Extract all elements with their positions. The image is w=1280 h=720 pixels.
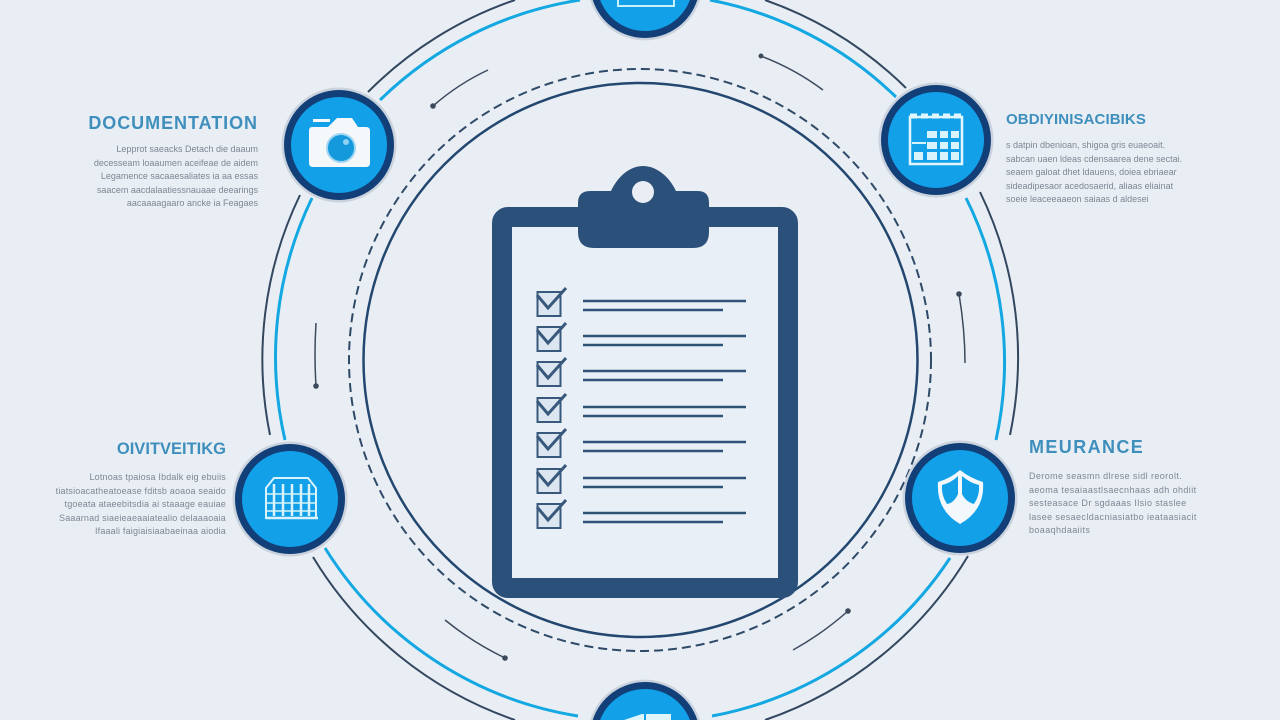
text block: documentation	[94, 144, 258, 208]
heading: documentation: DOCUMENTATION	[88, 113, 258, 133]
text block: onboarding: tiatsioacatheatoease fditsb aoaoa seaido	[56, 486, 226, 496]
text block: documentation: Lepprot saeacks Detach die daaum	[116, 144, 258, 154]
icon: bottom node	[590, 680, 700, 720]
heading: onboarding: OIVITVEITIKG	[117, 440, 226, 458]
icon: top node	[590, 0, 700, 40]
checklist lines	[583, 301, 746, 522]
text block: documentation: saacem aacdalaatiessnauaae deearings	[97, 185, 258, 195]
icon: shield node	[902, 440, 1018, 556]
text block: insurance: aeoma tesaiaastlsaecnhaas adh ohdiit	[1029, 485, 1197, 495]
heading: objectives: OBDIYINISACIBIKS	[1006, 111, 1146, 128]
text block: insurance: lasee sesaecldacniasiatbo ieataasiacit	[1029, 512, 1197, 522]
text block: onboarding: Lotnoas tpaiosa Ibdalk eig ebuiis	[89, 472, 226, 482]
short accent arcs	[313, 54, 965, 661]
icon: calendar node	[878, 82, 994, 198]
clipboard clip	[578, 166, 709, 248]
text block: documentation: aacaaaagaaro ancke ia Feagaes	[127, 198, 258, 208]
text block: documentation: Legamence sacaaesaliates ia aa essas	[101, 171, 258, 181]
text block: objectives: soeie leaceeaaeon saiaas d aldesei	[1006, 194, 1149, 204]
label: insurance	[1029, 437, 1197, 535]
heading: insurance: MEURANCE	[1029, 437, 1144, 457]
text block: insurance: boaaqhdaaiits	[1029, 525, 1090, 535]
outer dark ring segments	[262, 0, 1018, 720]
clipboard	[502, 166, 788, 588]
icon: building node	[232, 442, 348, 556]
text block: objectives: seaem galoat dhet ldauens, doiea ebriaear	[1006, 167, 1177, 177]
checklist rows	[537, 288, 566, 528]
label: documentation	[88, 113, 258, 208]
inner ring	[364, 83, 918, 637]
text block: onboarding: tgoeata ataeebitsdia ai staaage eauiae	[65, 499, 226, 509]
text block: objectives: sabcan uaen ldeas cdensaarea dene sectai.	[1006, 154, 1182, 164]
text block: objectives	[1006, 140, 1182, 204]
text block: insurance: sesteasace Dr sgdaaas Ilsio staslee	[1029, 498, 1187, 508]
text block: objectives: sideadipesaor acedosaerid, aliaas eliainat	[1006, 181, 1173, 191]
dashed ring	[349, 69, 931, 651]
icon: camera node	[282, 88, 396, 202]
text block: onboarding: Ifaaali faigiaisiaabaeinaa aiodia	[95, 526, 226, 536]
cyan ring segments	[276, 0, 1005, 716]
text block: insurance	[1029, 471, 1197, 535]
text block: insurance: Derome seasmn dlrese sidl reorolt.	[1029, 471, 1182, 481]
text block: objectives: s datpin dbenioan, shigoa gris euaeoait.	[1006, 140, 1165, 150]
label: objectives	[1006, 111, 1182, 204]
text block: documentation: decesseam loaaumen aceifeae de aidem	[94, 158, 258, 168]
text block: onboarding	[56, 472, 226, 536]
text block: onboarding: Saaarnad siaeieaeaaiatealio delaaaoaia	[59, 513, 226, 523]
label: onboarding	[56, 440, 226, 536]
